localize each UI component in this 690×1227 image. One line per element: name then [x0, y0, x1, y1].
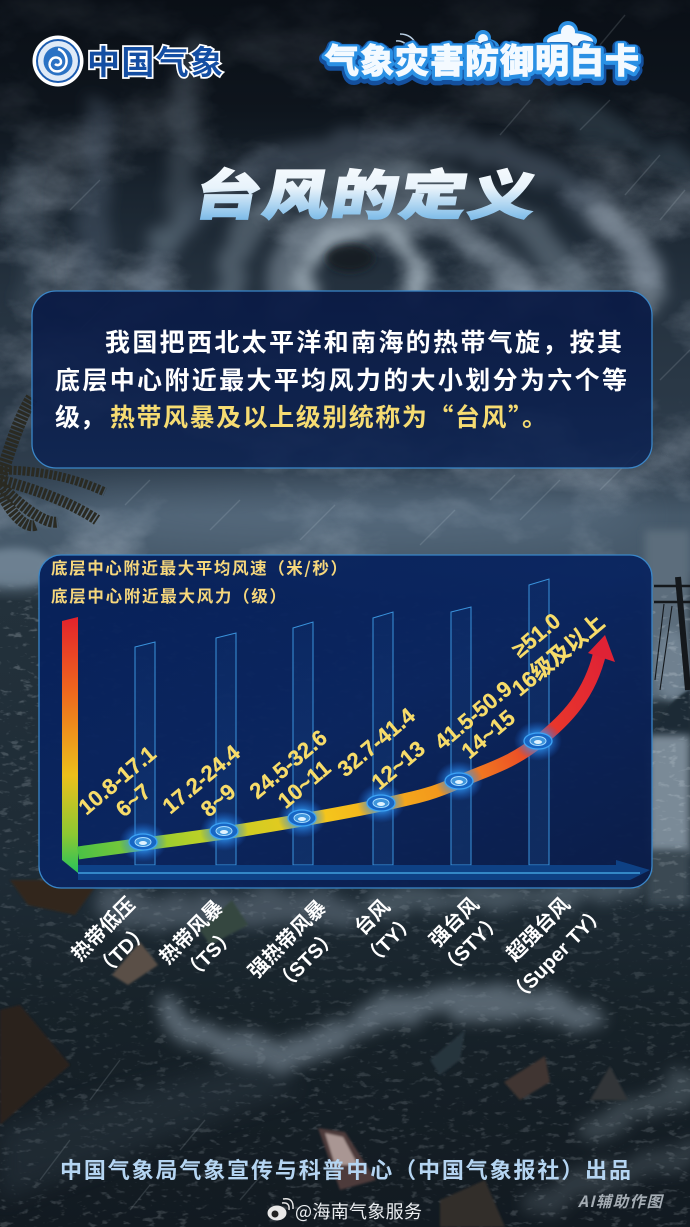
wind values: 17.2-24.4	[158, 739, 245, 819]
legend: speed and force: 底层中心附近最大风力（级）	[51, 583, 286, 607]
category labels: 台风	[349, 894, 395, 940]
wind values: 12~13	[366, 736, 430, 795]
legend: speed and force	[51, 555, 347, 607]
logo: 中国气象: 中国气象	[87, 36, 223, 84]
wind values: 16级及以上	[507, 610, 609, 701]
badge: 气象灾害防御明白卡: 气象灾害防御明白卡	[325, 34, 639, 83]
panel: wind scale chart	[39, 555, 652, 888]
text block: definition text: 热带风暴及以上级别统称为“台风”。	[110, 398, 547, 434]
wind values: 6~7	[111, 779, 156, 822]
sky band below text panel	[50, 485, 650, 545]
category labels: （STS）	[270, 924, 342, 996]
icon: utility pole	[654, 577, 690, 690]
text block: definition text	[55, 323, 627, 434]
footer: producer: 中国气象局气象宣传与科普中心（中国气象报社）出品	[60, 1153, 631, 1185]
category labels: （Super TY）	[504, 901, 611, 1008]
category labels: 热带风暴	[155, 896, 228, 969]
category labels: 热带低压	[67, 893, 140, 966]
wind values: ≥51.0	[507, 608, 565, 662]
category labels: （TY）	[358, 909, 421, 972]
right sky	[645, 530, 690, 700]
sea foam bands	[110, 885, 690, 1200]
category labels: （TS）	[178, 923, 241, 986]
wind values: 41.5-50.9	[430, 676, 517, 755]
legend: speed and force: 底层中心附近最大平均风速（米/秒）	[51, 555, 347, 579]
text block: definition text: 我国把西北太平洋和南海的热带气旋，按其	[105, 323, 622, 359]
category labels: （STY）	[435, 908, 507, 980]
icon: clouds	[396, 21, 597, 54]
growth curve arrow	[78, 635, 615, 853]
icon: weibo	[268, 1199, 293, 1220]
logo: 中国气象	[32, 36, 223, 86]
category labels: 强台风	[424, 892, 484, 952]
badge: 气象灾害防御明白卡: 气象灾害防御明白卡	[325, 35, 639, 84]
nodes	[119, 721, 562, 862]
watermark: AI: AI辅助作图	[577, 1190, 664, 1212]
category labels: 强热带风暴	[244, 896, 331, 983]
wind values: 32.7-41.4	[333, 702, 420, 782]
wind values: 14~15	[456, 705, 520, 764]
bars	[135, 579, 549, 865]
text block: definition text: 底层中心附近最大平均风力的大小划分为六个等	[55, 361, 627, 397]
category labels: 超强台风	[501, 892, 575, 966]
wind values	[74, 608, 609, 822]
wind values: 24.5-32.6	[245, 725, 332, 804]
icon: debris and boats	[0, 880, 628, 1227]
cyclone spiral bands	[23, 50, 690, 300]
watermark: weibo: @海南气象服务	[295, 1198, 422, 1224]
icon: palm tree silhouette	[0, 398, 105, 526]
icon: emblem	[32, 36, 84, 86]
badge: 气象灾害防御明白卡: 气象灾害防御明白卡	[325, 37, 639, 86]
wind values: 10~11	[273, 755, 335, 813]
title: 台风的定义: 台风的定义	[189, 153, 543, 230]
panel: definition	[32, 291, 652, 468]
x axis arrow	[78, 860, 650, 880]
wind values: 10.8-17.1	[74, 741, 161, 820]
wind values: 8~9	[196, 779, 241, 822]
y axis	[62, 617, 78, 873]
category labels	[67, 892, 611, 1008]
text block: definition text: 级，	[55, 398, 105, 434]
left wave crest	[0, 548, 57, 588]
category labels: （TD）	[91, 919, 154, 982]
